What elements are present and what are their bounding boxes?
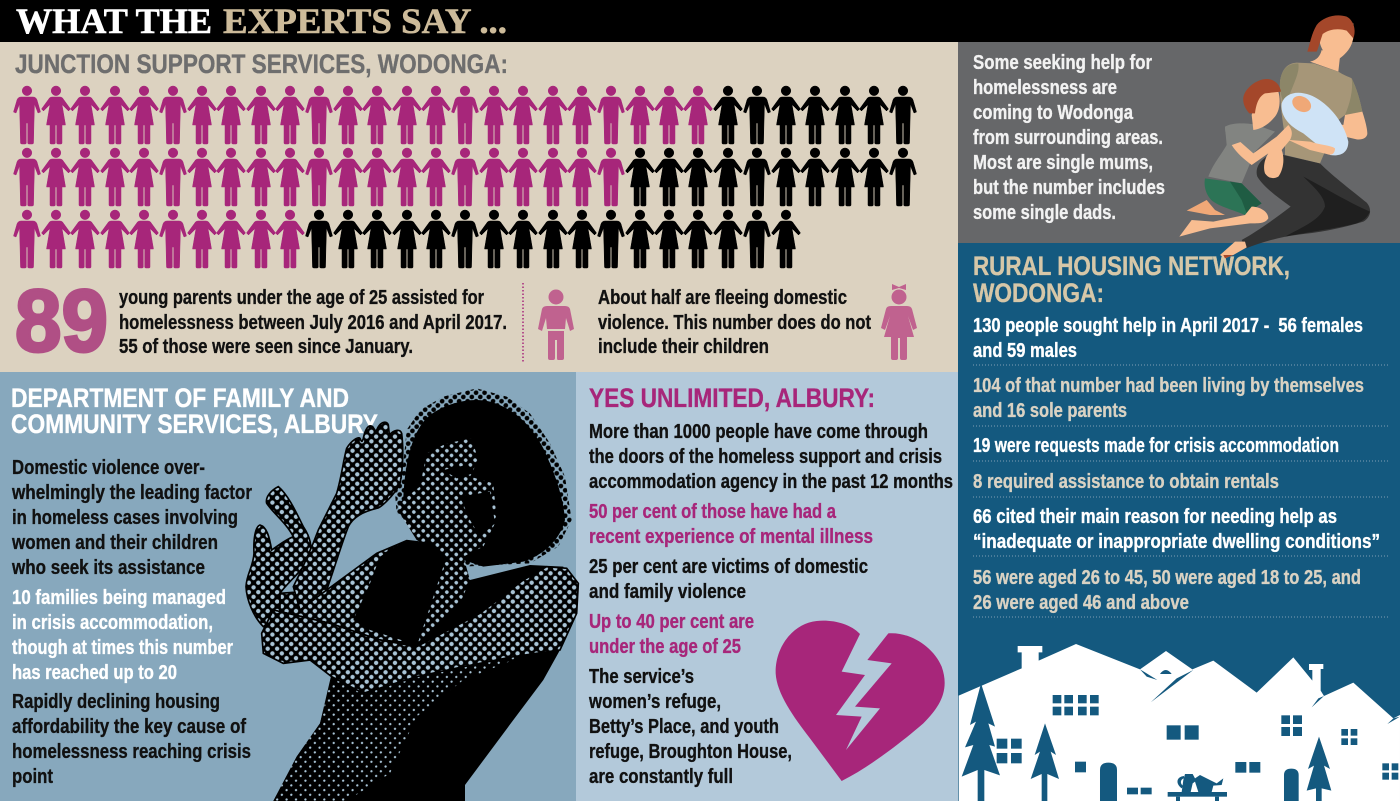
- illustration: houses and trees: [959, 644, 1400, 801]
- heading: Rural Housing Network: RURAL HOUSING NETWORK,: [973, 251, 1290, 281]
- baby: [1281, 93, 1348, 155]
- heading: Rural Housing Network: WODONGA:: [973, 278, 1104, 308]
- boy head: [1252, 92, 1280, 130]
- text: coming to Wodonga from surrounding areas: Some seeking help for: [973, 52, 1152, 74]
- heading: Junction Support Services: JUNCTION SUPPORT SERVICES, WODONGA:: [15, 49, 508, 79]
- text: mental illness: [589, 501, 873, 548]
- heading: Rural Housing Network: [973, 251, 1290, 308]
- panel: Department of Family and Community Services: [11, 383, 578, 801]
- title: EXPERTS SAY ...: [223, 1, 507, 41]
- text: coming to Wodonga from surrounding areas: homelessness are: [973, 77, 1117, 99]
- text: domestic violence leading factor: Domestic violence over-: [12, 457, 205, 479]
- text: refuges constantly full: women’s refuge,: [588, 691, 721, 713]
- text: living by themselves: and 16 sole parents: [973, 400, 1127, 422]
- heading: Department of Family and Community Services: COMMUNITY SERVICES, ALBURY: [11, 409, 378, 439]
- text: domestic violence leading factor: whelmingly the leading factor: [11, 482, 252, 504]
- text: under the age of 25: under the age of 25: [589, 636, 741, 658]
- text: refuges constantly full: are constantly full: [589, 766, 733, 788]
- text: domestic violence leading factor: who seek its assistance: [11, 557, 205, 579]
- mother foot: [1220, 242, 1247, 258]
- title: WHAT THE: [16, 1, 212, 41]
- text: people through the agency: the doors of the homeless support and crisis: [589, 446, 942, 468]
- text: housing affordability: Rapidly declining housing: [12, 691, 220, 713]
- text: rental assistance: 8 required assistance to obtain rentals: [973, 471, 1279, 493]
- text: housing affordability: affordability the key cause of: [12, 716, 246, 738]
- text: coming to Wodonga from surrounding areas: from surrounding areas.: [973, 127, 1163, 149]
- heading: YES Unlimited: YES UNLIMITED, ALBURY:: [589, 383, 875, 413]
- text: age groups: [973, 567, 1361, 614]
- heading: Department of Family and Community Services: DEPARTMENT OF FAMILY AND: [11, 383, 349, 413]
- text: main reason for help: 66 cited their main reason for needing help as: [973, 506, 1337, 528]
- text: living by themselves: [973, 375, 1364, 422]
- houses silhouette: [959, 644, 1400, 801]
- trees: [962, 683, 1331, 801]
- text: housing affordability: point: [12, 766, 53, 788]
- title: [16, 1, 507, 41]
- mother arm: [1308, 112, 1367, 139]
- text: coming to Wodonga from surrounding areas: some single dads.: [973, 202, 1116, 224]
- text: fleeing domestic violence: violence. This number does do not: [598, 312, 871, 334]
- text: housing affordability: homelessness reaching crisis: [12, 741, 251, 763]
- panel: YES Unlimited: [588, 383, 953, 788]
- panel: Rural Housing Network: [959, 251, 1400, 801]
- text: refuges constantly full: Betty’s Place, and youth: [589, 716, 779, 738]
- text: families in crisis accommodation: [12, 587, 233, 684]
- text: people sought help: and 59 males: [973, 340, 1077, 362]
- text: under the age of 25: [589, 611, 754, 658]
- text: people through the agency: [589, 421, 953, 493]
- text: people through the agency: More than 1000 people have come through: [589, 421, 928, 443]
- text: coming to Wodonga from surrounding areas: [973, 52, 1165, 224]
- panel: Junction Support Services: [14, 49, 917, 370]
- text: families in crisis accommodation: in crisis accommodation,: [12, 612, 213, 634]
- heading: Department of Family and Community Services: [11, 383, 378, 439]
- text: refuges constantly full: [588, 666, 792, 788]
- illustration: mother with baby and child: [1179, 15, 1370, 258]
- boy legs and feet: [1187, 200, 1225, 215]
- text: refuges constantly full: The service’s: [589, 666, 694, 688]
- boy shirt: [1208, 123, 1275, 183]
- text: coming to Wodonga from surrounding areas: coming to Wodonga: [973, 102, 1134, 124]
- windows: [997, 695, 1398, 794]
- text: domestic violence leading factor: women and their children: [11, 532, 218, 554]
- illustration: halftone woman shielding herself: [246, 388, 578, 801]
- text: fleeing domestic violence: [598, 287, 871, 358]
- icon: girl: [881, 284, 917, 360]
- text: families in crisis accommodation: has reached up to 20: [12, 662, 177, 684]
- text: people through the agency: accommodation agency in the past 12 months: [589, 471, 953, 493]
- mother neck and head: [1310, 50, 1340, 72]
- boy arm and hands: [1232, 125, 1292, 178]
- mother shirt: [1280, 63, 1362, 163]
- text: domestic and family violence: [589, 556, 868, 603]
- doors: [1100, 763, 1299, 801]
- text: housing affordability: [12, 691, 251, 788]
- text: domestic and family violence: 25 per cent are victims of domestic: [589, 556, 868, 578]
- text: young parents assisted: 55 of those were seen since January.: [119, 336, 413, 358]
- text: mental illness: 50 per cent of those have had a: [589, 501, 837, 523]
- text: domestic and family violence: and family violence: [589, 581, 746, 603]
- mother trousers: [1242, 155, 1370, 248]
- text: young parents assisted: young parents under the age of 25 assisted for: [119, 287, 484, 309]
- text: mental illness: recent experience of mental illness: [589, 526, 873, 548]
- text: fleeing domestic violence: About half are fleeing domestic: [598, 287, 847, 309]
- bench with cats: [1168, 774, 1227, 801]
- text: families in crisis accommodation: though at times this number: [12, 637, 233, 659]
- big number 89: 89: [15, 271, 108, 370]
- text: people sought help: [973, 315, 1363, 362]
- boy shorts: [1205, 178, 1261, 215]
- icon: broken heart: [776, 621, 945, 781]
- text: young parents assisted: homelessness between July 2016 and April 2017.: [119, 312, 507, 334]
- text: under the age of 25: Up to 40 per cent are: [589, 611, 754, 633]
- arms reaching to baby: [1285, 138, 1335, 155]
- text: fleeing domestic violence: include their children: [598, 336, 769, 358]
- text: coming to Wodonga from surrounding areas: Most are single mums,: [973, 152, 1153, 174]
- text: domestic violence leading factor: in homeless cases involving: [12, 507, 238, 529]
- text: young parents assisted: [119, 287, 507, 358]
- text: refuges constantly full: refuge, Broughton House,: [589, 741, 792, 763]
- text: coming to Wodonga from surrounding areas: but the number includes: [973, 177, 1165, 199]
- pictogram: 89 young parents, 55 highlighted: [14, 86, 916, 268]
- text: families in crisis accommodation: 10 families being managed: [12, 587, 226, 609]
- text: domestic violence leading factor: [11, 457, 252, 579]
- text: age groups: 26 were aged 46 and above: [973, 592, 1189, 614]
- text: main reason for help: [973, 506, 1380, 553]
- icon: boy: [538, 290, 574, 360]
